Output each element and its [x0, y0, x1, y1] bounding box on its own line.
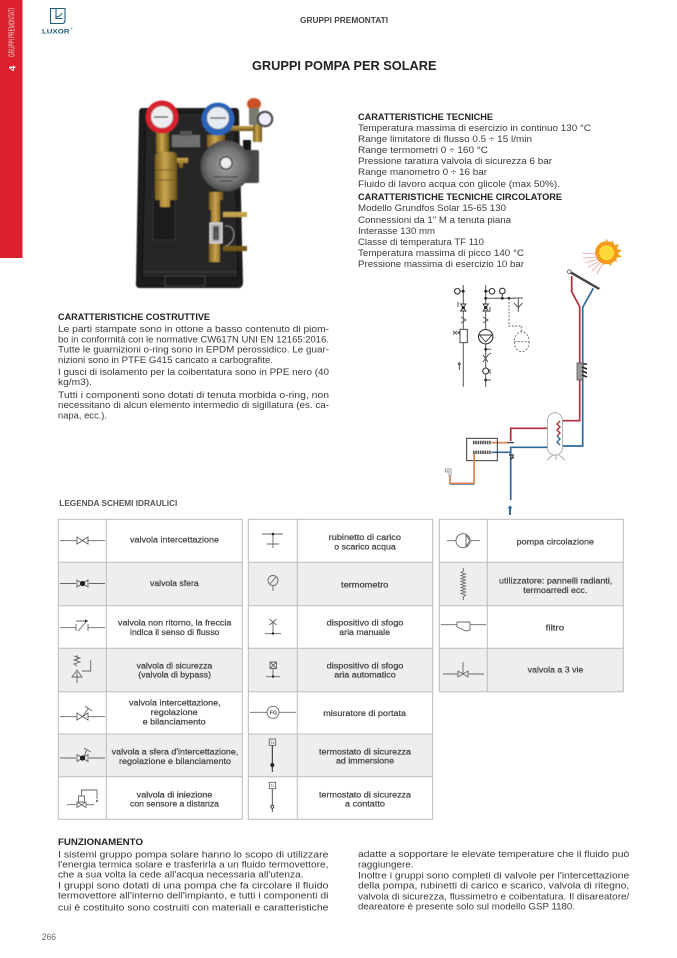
legend table 3: [439, 519, 623, 692]
sidebar: section tab: 4: [8, 65, 18, 71]
text block: caratteristiche tecniche: Range limitatore di flusso 0.5 ÷ 15 l/min: [358, 134, 532, 145]
icon: valvola non ritorno: [60, 620, 105, 631]
legend labels 1: con sensore a distanza: [130, 800, 220, 809]
icon: sfogo aria manuale: [265, 619, 281, 635]
legend labels 2: rubinetto di carico: [329, 533, 402, 542]
logo: Luxor: [42, 8, 74, 36]
text block: funzionamento left column: cui è costituito sono costruiti con materiali e caratteristiche: [58, 902, 328, 913]
text block: caratteristiche costruttive: [58, 312, 329, 422]
pump station on line: [577, 363, 587, 380]
text block: caratteristiche costruttive: necessitano di alcun elemento intermedio di sigillatura (es. ca-: [58, 400, 329, 411]
text block: caratteristiche costruttive: I gusci di isolamento per la coibentatura sono in PPE nero (40: [58, 367, 329, 378]
page number: 266: [42, 932, 56, 942]
legend labels 2: [319, 533, 412, 809]
legend labels 1: valvola sfera: [150, 579, 199, 588]
heat exchanger box: [467, 438, 497, 461]
text block: funzionamento right column: [358, 849, 630, 912]
text block: caratteristiche tecniche: Interasse 130 mm: [358, 226, 435, 237]
logo: Luxor: ®: [70, 26, 74, 30]
text block: caratteristiche costruttive: Le parti stampate sono in ottone a basso contenuto di piom-: [58, 324, 329, 335]
text block: funzionamento left column: FUNZIONAMENTO: [58, 837, 143, 847]
cold pipe: [560, 288, 593, 446]
icon: sfogo aria automatico: [266, 662, 280, 678]
legend labels 2: a contatto: [345, 800, 386, 809]
valves on schematic: [460, 304, 488, 311]
legend labels 2: o scarico acqua: [334, 542, 396, 551]
legend labels 3: utilizzatore: pannelli radianti,: [499, 577, 612, 586]
text block: caratteristiche tecniche: Pressione taratura valvola di sicurezza 6 bar: [358, 156, 553, 167]
legend table 1: [58, 519, 242, 819]
icon: termometro: [268, 576, 278, 591]
legend labels 1: regolazione: [151, 708, 198, 717]
solar collector: [570, 272, 599, 289]
icon: misuratore di portata: [250, 706, 296, 718]
text block: funzionamento right column: della pompa, rubinetti di carico e scarico, valvola di ritegno,: [358, 881, 629, 892]
header label: GRUPPI PREMONTATI: [300, 16, 388, 25]
legend labels 2: termostato di sicurezza: [319, 791, 412, 800]
fittings: [508, 443, 514, 460]
legend heading: LEGENDA SCHEMI IDRAULICI: [59, 499, 177, 508]
text block: caratteristiche tecniche: Range termometri 0 ÷ 160 °C: [358, 145, 488, 156]
text block: funzionamento left column: l'energia termica solare e trasferirla a un fluido termovettore,: [58, 859, 328, 870]
text block: caratteristiche tecniche: Pressione massima di esercizio 10 bar: [358, 259, 525, 270]
legend labels 1: (valvola di bypass): [138, 671, 211, 680]
legend labels 2: termometro: [341, 581, 389, 590]
legend labels 1: valvola di sicurezza: [137, 661, 213, 670]
legend labels 1: regolazione e bilanciamento: [119, 757, 232, 766]
text block: funzionamento left column: che a sua volta la cede all'acqua necessaria all'utenza.: [58, 869, 304, 880]
legend labels 1: valvola di iniezione: [137, 791, 213, 800]
text block: funzionamento right column: adatte a sopportare le elevate temperature che il fluido può: [358, 849, 629, 860]
logo: Luxor: LUXOR: [42, 29, 70, 36]
legend labels 2: aria automatico: [334, 671, 396, 680]
hydraulic schematic: [453, 285, 529, 387]
icon: utilizzatore: [461, 568, 466, 600]
legend labels 3: termoarredi ecc.: [523, 586, 587, 595]
text block: caratteristiche tecniche: Fluido di lavoro acqua con glicole (max 50%).: [358, 179, 560, 190]
legend labels 2: aria manuale: [339, 628, 391, 637]
icon: valvola di sicurezza: [72, 655, 91, 683]
legend labels 1: e bilanciamento: [143, 717, 206, 726]
storage tank: [547, 413, 565, 460]
text block: caratteristiche tecniche: Modello Grundfos Solar 15-65 130: [358, 203, 506, 214]
icon: termostato a contatto: T1: [270, 784, 274, 788]
text block: funzionamento left column: termovettore all'interno dell'impianto, e tutti i componenti di: [58, 891, 328, 902]
legend labels 1: valvola intercettazione: [130, 536, 220, 545]
text block: caratteristiche tecniche: Temperatura massima di picco 140 °C: [358, 248, 524, 259]
hot pipe: [558, 276, 580, 421]
icon: valvola intercettazione: [60, 537, 105, 544]
boiler connections: [511, 428, 547, 441]
icon: sun: [582, 238, 622, 274]
text block: caratteristiche costruttive: bo in conformità con le normative CW617N UNI EN 12165:2016.: [58, 334, 329, 346]
text block: caratteristiche tecniche: CARATTERISTICHE TECNICHE CIRCOLATORE: [358, 192, 562, 202]
solar system diagram: [446, 238, 622, 515]
legend labels 3: pompa circolazione: [517, 538, 595, 547]
text block: funzionamento right column: raggiungere.: [358, 859, 414, 870]
text block: caratteristiche costruttive: kg/m3).: [58, 377, 92, 388]
text block: caratteristiche tecniche: Temperatura massima di esercizio in continuo 130 °C: [358, 123, 591, 134]
legend labels 2: dispositivo di sfogo: [327, 618, 404, 627]
arrow: cold water inlet: [508, 505, 512, 515]
product photo: solar pump group: [136, 98, 273, 288]
text block: caratteristiche costruttive: Tutte le guarnizioni o-ring sono in EPDM perossidico. Le guar-: [58, 344, 329, 356]
icon: filtro: [441, 622, 486, 631]
legend labels 1: valvola intercettazione,: [129, 698, 221, 707]
icon: valvola a sfera con bilanciamento: [60, 748, 105, 762]
expansion vessel dashed: [509, 298, 529, 342]
sidebar: section tab: [0, 0, 22, 258]
text block: funzionamento right column: Inoltre i gruppi sono completi di valvole per l'intercettazione: [358, 871, 629, 882]
text block: funzionamento right column: deareatore è presente solo sul modello GSP 1180.: [358, 901, 575, 912]
legend labels 1: [112, 536, 238, 809]
legend labels 2: ad immersione: [336, 757, 395, 766]
icon: valvola intercettazione e bilanciamento: [60, 706, 105, 720]
gauges on schematic: [454, 288, 505, 374]
title: GRUPPI POMPA PER SOLARE: [252, 58, 437, 73]
text block: funzionamento right column: valvola di sicurezza, flussimetro e coibentatura. Il disareatore/: [358, 891, 630, 902]
icon: misuratore di portata: FG: [270, 710, 277, 716]
text block: funzionamento left column: [58, 837, 328, 913]
icon: termostato ad immersione: T1: [270, 741, 274, 745]
icon: rubinetto di carico: [262, 533, 283, 548]
legend labels 3: filtro: [546, 623, 565, 632]
legend table 2: [248, 519, 433, 819]
text block: caratteristiche tecniche: CARATTERISTICHE TECNICHE: [358, 112, 493, 122]
icon: termostato a contatto: [269, 782, 276, 812]
icon: valvola di iniezione: [67, 790, 98, 808]
text block: funzionamento left column: I sistemi gruppo pompa solare hanno lo scopo di utilizzare: [58, 850, 328, 861]
icon: pompa circolazione: [447, 534, 480, 548]
icon: valvola sfera: [60, 580, 105, 587]
text block: caratteristiche costruttive: nizioni sono in PTFE G415 caricato a carbografite.: [58, 355, 273, 366]
icon: valvola a 3 vie: [443, 662, 484, 677]
legend labels 1: indica il senso di flusso: [130, 628, 220, 637]
legend labels 3: valvola a 3 vie: [528, 666, 584, 675]
legend labels 2: dispositivo di sfogo: [327, 661, 404, 670]
legend labels 3: [499, 538, 612, 675]
text block: caratteristiche tecniche: Connessioni da 1" M a tenuta piana: [358, 215, 512, 226]
text block: caratteristiche tecniche: [358, 112, 591, 270]
legend labels 1: valvola non ritorno, la freccia: [118, 618, 232, 627]
text block: caratteristiche costruttive: CARATTERISTICHE COSTRUTTIVE: [58, 312, 210, 322]
text block: caratteristiche tecniche: Range manometro 0 ÷ 16 bar: [358, 167, 488, 178]
domestic hot water outlet: [446, 454, 474, 484]
legend labels 2: termostato di sicurezza: [319, 747, 412, 756]
legend labels 2: misuratore di portata: [323, 709, 407, 718]
text block: caratteristiche costruttive: Tutti i componenti sono dotati di tenuta morbida o-ring, non: [58, 390, 329, 401]
text block: caratteristiche tecniche: Classe di temperatura TF 110: [358, 237, 484, 248]
icon: termostato ad immersione: [269, 739, 276, 772]
legend labels 1: valvola a sfera d'intercettazione,: [112, 747, 238, 756]
text block: caratteristiche costruttive: napa, ecc.).: [58, 410, 107, 422]
text block: funzionamento left column: I gruppi sono dotati di una pompa che fa circolare il fluido: [58, 881, 328, 892]
